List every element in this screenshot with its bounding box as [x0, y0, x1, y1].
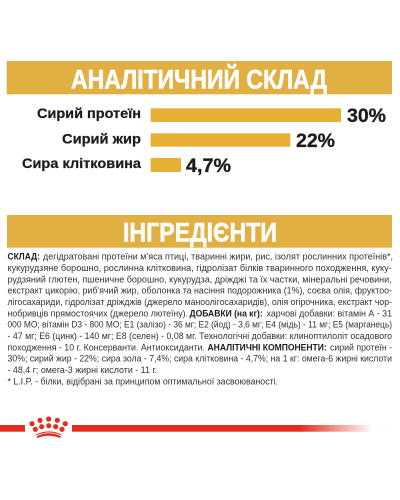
bar row: crude protein 30%: 30%	[347, 106, 386, 127]
text block: ingredients list: * L.I.P. - білки, відібрані за принципом оптимальної засвоюваності.	[8, 376, 278, 387]
text block: ingredients list	[8, 252, 393, 387]
panel: analytical composition	[7, 61, 392, 177]
text block: ingredients list: сирий протеїн -	[330, 342, 392, 353]
bar row: crude fibre 4.7%: 4,7%	[186, 156, 231, 177]
bar row: crude fat 22%: 22%	[296, 131, 335, 152]
footer: red brand line	[0, 425, 373, 432]
text block: ingredients list: - 48,4 г; омега-3 жирні кислоти - 11 г.	[8, 365, 157, 376]
bar row: crude fat 22%: Сирий жир	[62, 130, 141, 146]
text block: ingredients list: АНАЛІТИЧНІ КОМПОНЕНТИ:	[208, 342, 327, 353]
text block: ingredients list: СКЛАД:	[8, 252, 40, 263]
bar chart: nutrient percentages	[22, 105, 386, 177]
icon: Royal Canin crown	[29, 416, 68, 438]
panel: ingredients	[7, 215, 393, 387]
text block: ingredients list: нобривців прямостоячих (джерело лютеїну).	[8, 308, 188, 319]
text block: ingredients list: харчові добавки: вітамін А - 31	[266, 308, 392, 319]
heading band: ingredients: ІНГРЕДІЄНТИ	[123, 218, 277, 248]
text block: ingredients list: ДОБАВКИ (на кг):	[190, 308, 263, 319]
heading band: analytical composition: АНАЛІТИЧНИЙ СКЛАД	[71, 63, 327, 94]
heading band: ingredients	[7, 215, 392, 248]
bar row: crude fat 22%	[62, 130, 335, 152]
text block: ingredients list: походження - 10 г. Консерванти. Антиоксиданти.	[8, 342, 205, 353]
bar row: crude protein 30%: Сирий протеїн	[37, 105, 141, 121]
bar row: crude protein 30%	[37, 105, 386, 127]
bar row: crude fibre 4.7%	[22, 155, 231, 177]
bar row: crude fibre 4.7%: Сира клітковина	[22, 155, 141, 171]
